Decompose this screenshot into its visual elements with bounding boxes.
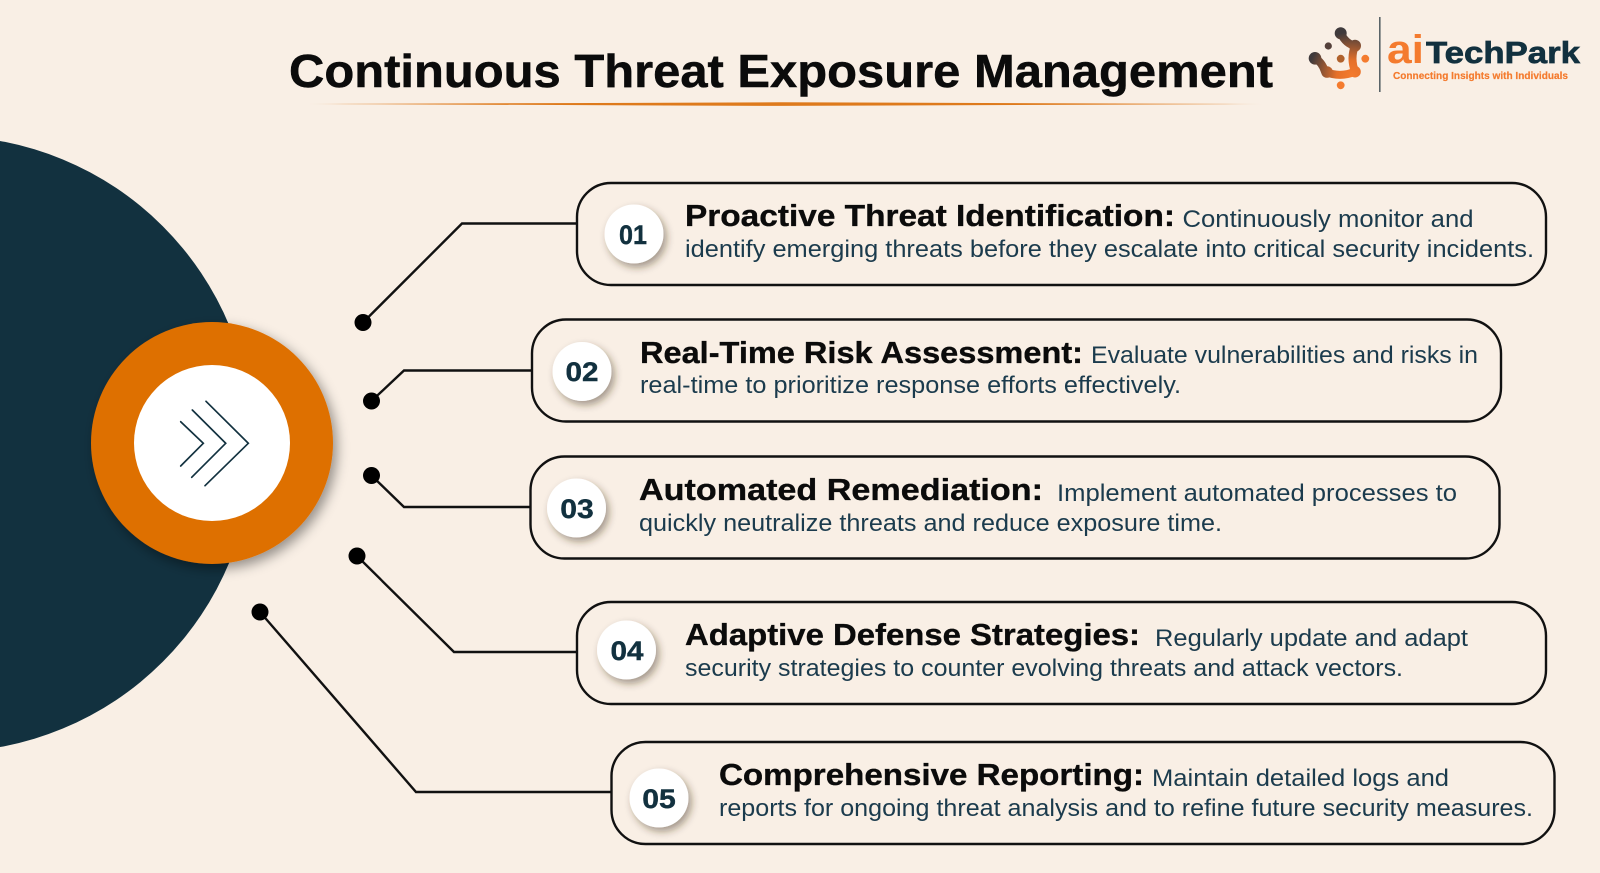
panel: Proactive Threat Identification (577, 183, 1546, 285)
logo: aiTechPark: ai (1387, 28, 1424, 72)
panel: Comprehensive Reporting: reports for ongoing threat analysis and to refine future security measures. (719, 795, 1533, 822)
panel: Automated Remediation: Implement automated processes to (1057, 480, 1457, 507)
icon: triple chevron arrow (181, 401, 248, 486)
logo: aiTechPark: Connecting Insights with Individuals (1393, 70, 1568, 82)
panel: Comprehensive Reporting (612, 742, 1554, 844)
panel: Adaptive Defense Strategies: security strategies to counter evolving threats and attack vectors. (685, 655, 1403, 682)
orange ring with white centre (91, 322, 333, 564)
panel: Real-Time Risk Assessment (532, 320, 1501, 422)
panel: Adaptive Defense Strategies (577, 602, 1546, 704)
panel: Automated Remediation (530, 456, 1500, 558)
panel: Proactive Threat Identification: identify emerging threats before they escalate into critical security incidents. (685, 236, 1534, 263)
connector 3 (363, 467, 531, 507)
panel: Adaptive Defense Strategies: Regularly update and adapt (1155, 625, 1468, 652)
panel: Real-Time Risk Assessment: real-time to prioritize response efforts effectively. (640, 372, 1181, 399)
panel: Comprehensive Reporting: Comprehensive Reporting: (719, 757, 1144, 792)
panel: Comprehensive Reporting: Maintain detailed logs and (1152, 765, 1449, 792)
connector 1 (354, 224, 577, 331)
panel: Proactive Threat Identification: 01 (619, 220, 647, 250)
panel: Comprehensive Reporting: 05 (642, 784, 676, 814)
connector 5 (252, 604, 611, 792)
large dark semicircle (0, 136, 253, 752)
panel: Real-Time Risk Assessment: Evaluate vulnerabilities and risks in (1091, 342, 1478, 369)
panel: Adaptive Defense Strategies: 04 (610, 636, 644, 666)
connector 2 (363, 370, 532, 410)
panel: Real-Time Risk Assessment: Real-Time Risk Assessment: (640, 335, 1083, 370)
logo: aiTechPark: TechPark (1426, 35, 1581, 70)
panel: Adaptive Defense Strategies: Adaptive Defense Strategies: (685, 617, 1140, 652)
panel: Proactive Threat Identification: Continuously monitor and (1182, 206, 1474, 233)
panel: Proactive Threat Identification: Proactive Threat Identification: (685, 198, 1175, 233)
panel: Automated Remediation: quickly neutralize threats and reduce exposure time. (639, 510, 1222, 537)
title: Continuous Threat Exposure Management (289, 45, 1273, 97)
logo: aiTechPark (1309, 17, 1581, 92)
connector 4 (348, 548, 577, 652)
panel: Automated Remediation: 03 (560, 494, 594, 524)
panel: Automated Remediation: Automated Remediation: (639, 472, 1043, 507)
panel: Real-Time Risk Assessment: 02 (566, 357, 598, 387)
